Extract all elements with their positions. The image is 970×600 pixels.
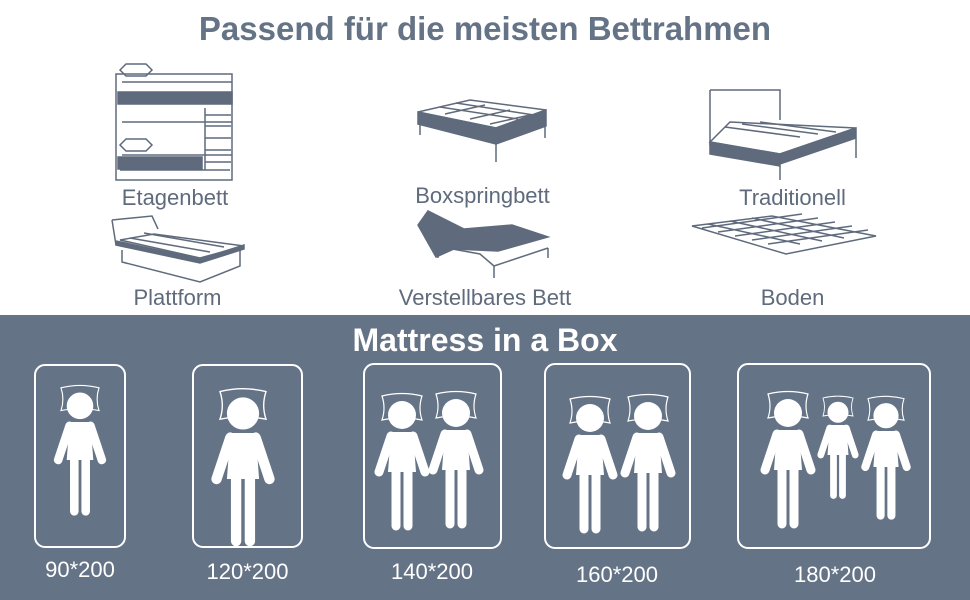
label: Plattform: Plattform [133, 285, 222, 310]
size labels: 90*200 [45, 557, 115, 582]
bed icons [111, 63, 876, 283]
label: Verstellbares Bett: Verstellbares Bett [399, 285, 571, 310]
label: Etagenbett: Etagenbett [122, 185, 228, 210]
icon: traditional [710, 90, 856, 180]
panel: mattress sizes: 180*200 [794, 562, 876, 587]
icon: platform [112, 216, 244, 282]
panel: mattress sizes: 120*200 [206, 559, 288, 584]
panel: mattress sizes [0, 315, 970, 600]
icon: floor [692, 214, 876, 254]
figures [58, 385, 907, 541]
title: Passend für die meisten Bettrahmen [199, 10, 771, 47]
panel: mattress sizes: 160*200 [576, 562, 658, 587]
heading: Mattress in a Box [353, 322, 617, 358]
icon: boxspring [418, 100, 546, 162]
label: Boden: Boden [761, 285, 824, 310]
icon: adjustable [418, 211, 548, 278]
panel: mattress sizes: 140*200 [391, 559, 473, 584]
label: Boxspringbett: Boxspringbett [415, 183, 550, 208]
label: Traditionell: Traditionell [739, 185, 846, 210]
icon: bunk bed [116, 64, 232, 180]
